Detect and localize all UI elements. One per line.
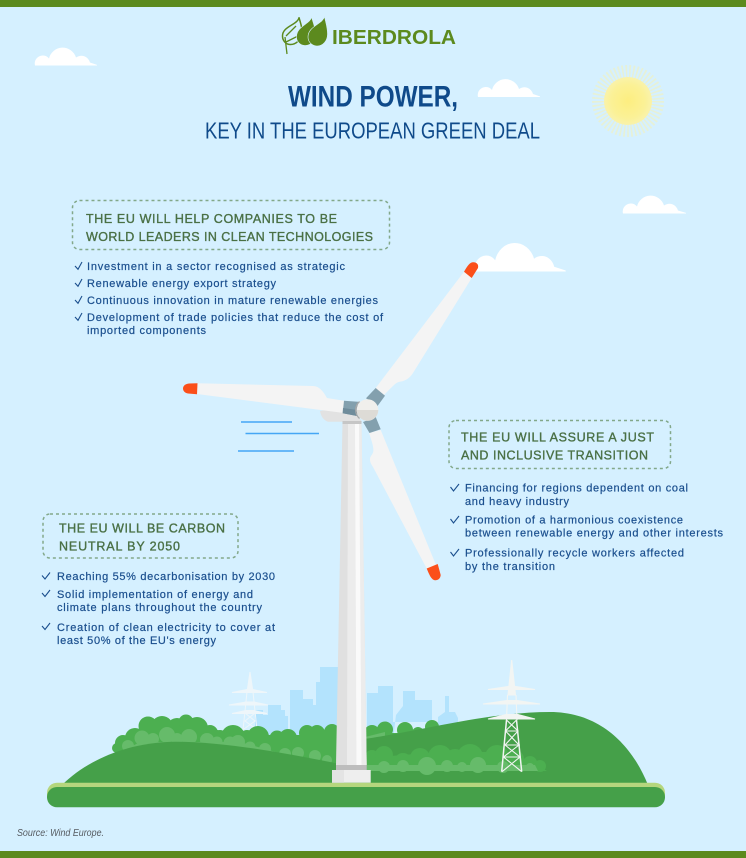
list: Creation of clean electricity to cover at: [57, 622, 275, 634]
panel: clean technologies: [72, 200, 390, 337]
blade: lower: [363, 417, 441, 580]
list: Reaching 55% decarbonisation by 2030: [57, 571, 275, 583]
heading box: WORLD LEADERS IN CLEAN TECHNOLOGIES: [86, 230, 373, 244]
list: Development of trade policies that reduce the cost of: [87, 312, 384, 324]
list: Continuous innovation in mature renewable energies: [87, 295, 378, 307]
list: climate plans throughout the country: [57, 602, 262, 614]
heading box: THE EU WILL ASSURE A JUST: [461, 430, 654, 444]
heading box: [449, 420, 670, 468]
list: Promotion of a harmonious coexistence: [465, 514, 683, 526]
cloud: under sun: [623, 196, 686, 214]
nacelle: [320, 405, 362, 422]
list: between renewable energy and other interests: [465, 528, 724, 540]
cloud: beside title: [478, 79, 540, 97]
back bushes: [112, 714, 440, 770]
blade: left: [183, 383, 358, 416]
left hill: [62, 742, 420, 785]
list: Investment in a sector recognised as strategic: [87, 261, 346, 273]
right bushes: [364, 744, 547, 772]
source note: Source: Wind Europe.: [17, 828, 104, 839]
wind lines: [238, 422, 319, 451]
list: [42, 571, 275, 647]
heading box: NEUTRAL BY 2050: [59, 540, 180, 554]
list: Professionally recycle workers affected: [465, 548, 684, 560]
panel: carbon neutral: [42, 514, 275, 647]
list: [75, 261, 384, 337]
list: [450, 482, 724, 573]
heading box: AND INCLUSIVE TRANSITION: [461, 448, 648, 462]
ground strip: [47, 783, 665, 807]
list: least 50% of the EU's energy: [57, 635, 216, 647]
heading box: [72, 200, 390, 250]
pylon: faded: [229, 672, 268, 730]
light right bushes: [366, 757, 538, 775]
logo wordmark: IBERDROLA: [332, 26, 456, 49]
title line 1: WIND POWER,: [288, 80, 458, 114]
wind turbine: [183, 262, 478, 783]
bottom bar: [0, 851, 746, 858]
right hill: [345, 712, 648, 785]
title line 2: KEY IN THE EUROPEAN GREEN DEAL: [205, 117, 540, 143]
top bar: [0, 0, 746, 7]
landscape: [47, 660, 665, 807]
list: imported components: [87, 325, 206, 337]
cloud: behind blade: [475, 243, 566, 272]
blade: upper: [366, 262, 478, 406]
icon: sun: [598, 72, 658, 130]
tower: [332, 421, 371, 783]
panel: just transition: [449, 420, 724, 573]
light bushes: [122, 727, 385, 770]
list: by the transition: [465, 561, 555, 573]
hub: [356, 399, 378, 421]
list: Solid implementation of energy and: [57, 589, 253, 601]
title: [205, 80, 540, 143]
heading box: THE EU WILL HELP COMPANIES TO BE: [86, 212, 337, 226]
heading box: [43, 514, 238, 558]
logo: Iberdrola: [282, 16, 456, 54]
list: Renewable energy export strategy: [87, 278, 276, 290]
city skyline: [255, 667, 480, 740]
list: Financing for regions dependent on coal: [465, 482, 688, 494]
heading box: THE EU WILL BE CARBON: [59, 522, 225, 536]
icon: leaves: [282, 16, 328, 54]
list: and heavy industry: [465, 496, 570, 508]
cloud: top left: [35, 48, 97, 66]
pylon: foreground: [483, 660, 540, 772]
